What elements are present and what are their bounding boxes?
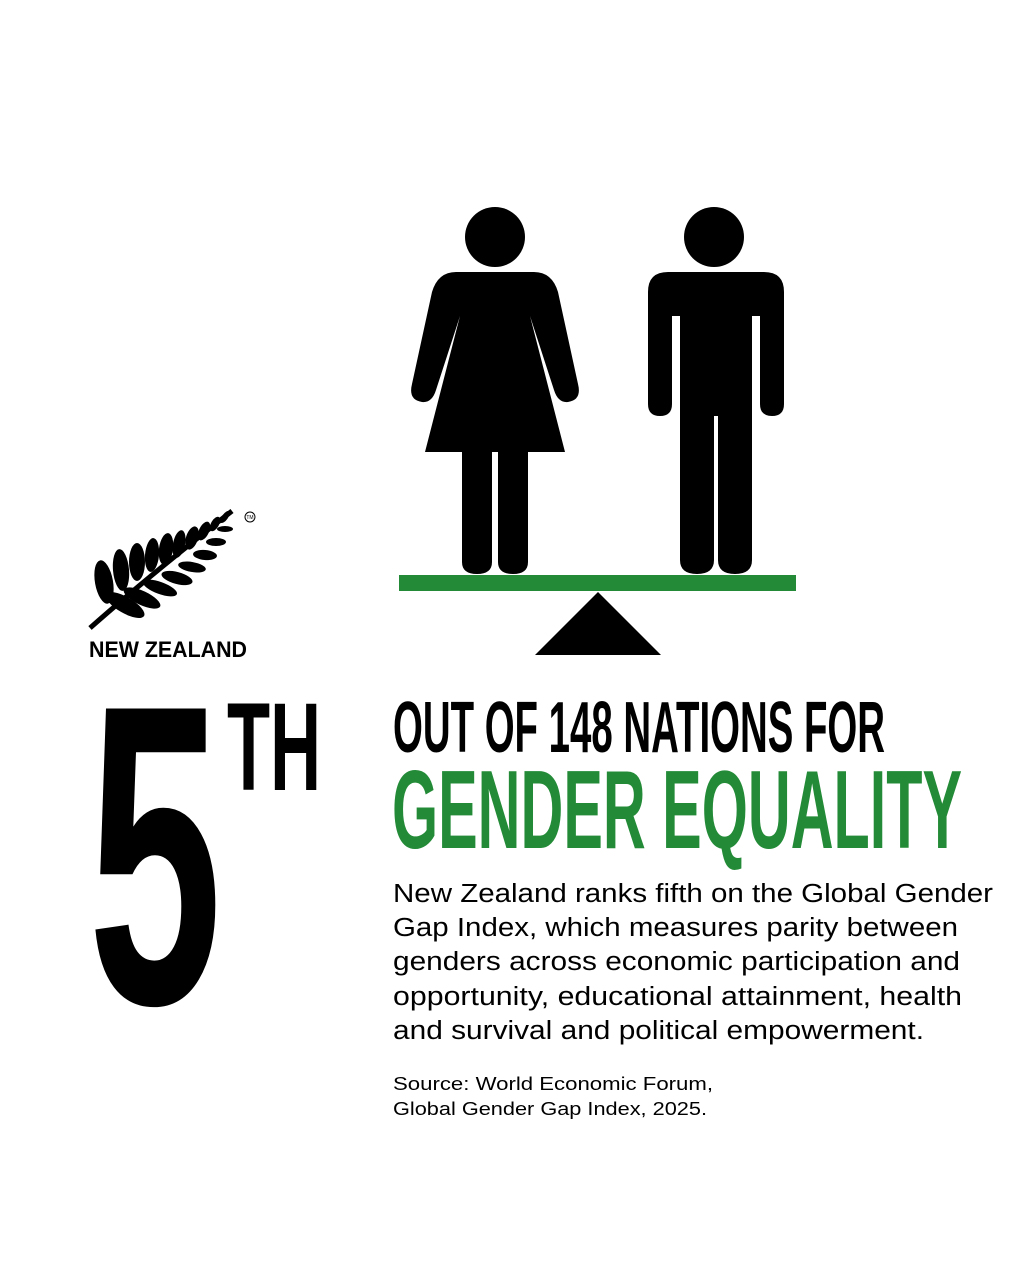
body text: and survival and political empowerment.	[393, 1017, 924, 1045]
balance beam	[399, 575, 796, 591]
big rank number 5th: 5	[88, 616, 222, 1094]
source note: Source: World Economic Forum,	[393, 1073, 713, 1094]
source note: Global Gender Gap Index, 2025.	[393, 1098, 707, 1119]
source note	[393, 1073, 713, 1119]
icon: woman figure	[411, 207, 579, 574]
body text: New Zealand ranks fifth on the Global Gender	[393, 880, 994, 908]
icon: man figure	[648, 207, 784, 574]
body text	[393, 880, 994, 1045]
body text: Gap Index, which measures parity between	[393, 914, 958, 942]
fulcrum triangle	[535, 592, 661, 655]
heading	[392, 688, 962, 872]
big rank number 5th: TH	[227, 678, 321, 817]
logo: silver fern New Zealand: TM	[246, 515, 254, 521]
body text: genders across economic participation and	[393, 948, 960, 976]
logo: silver fern New Zealand: NEW ZEALAND	[89, 637, 247, 662]
body text: opportunity, educational attainment, health	[393, 983, 962, 1011]
logo: silver fern New Zealand	[89, 510, 255, 662]
